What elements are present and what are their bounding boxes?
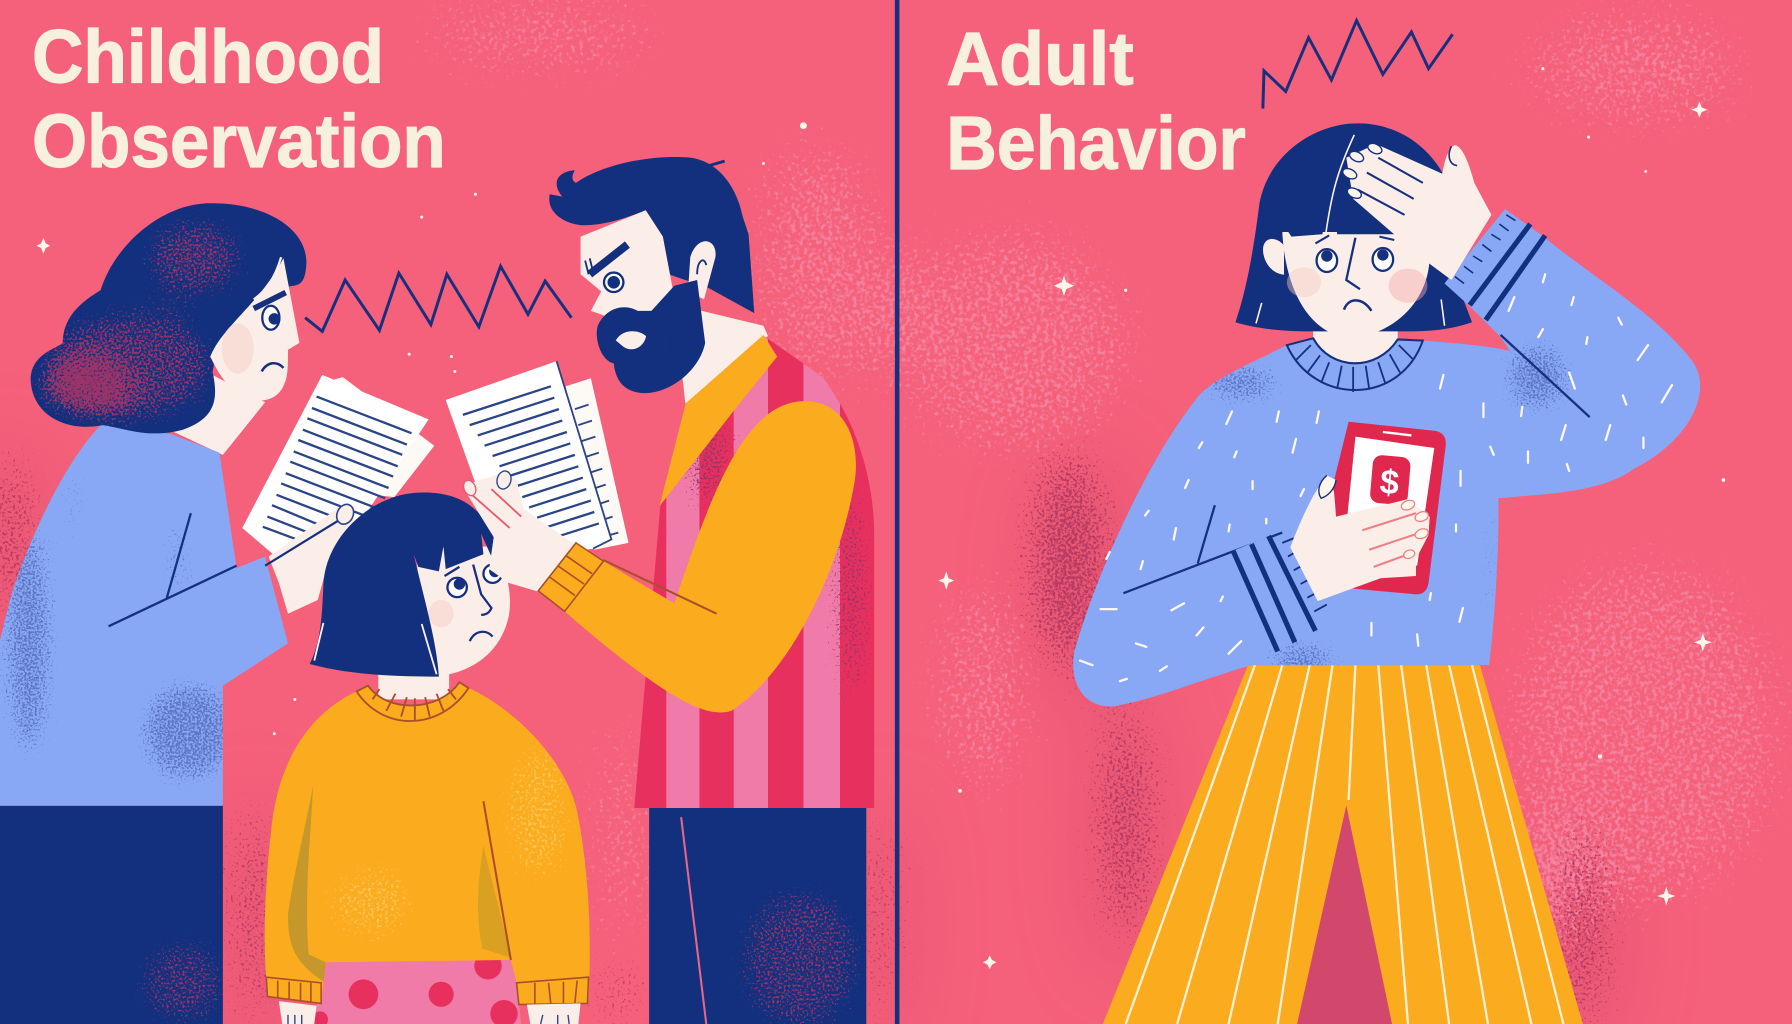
mouth <box>615 331 647 350</box>
father arm <box>565 401 856 712</box>
arm crease <box>603 560 717 614</box>
eyes <box>1317 249 1337 272</box>
arrow: zigzag stress line <box>1263 21 1453 109</box>
trouser stripes <box>1126 665 1563 1024</box>
back sheet lines <box>575 405 618 537</box>
fringe highlight <box>1326 135 1354 234</box>
papers held by mother <box>242 375 434 560</box>
father neck <box>681 309 768 407</box>
holding hand finger lines and nails <box>1362 513 1421 567</box>
eye <box>262 306 279 330</box>
icon: sparkles and dots <box>938 67 1725 969</box>
left cuff <box>1233 536 1327 651</box>
face <box>210 258 299 400</box>
eye <box>604 273 623 292</box>
hair speckle <box>29 211 251 429</box>
background texture: dark speckle <box>0 423 1622 1024</box>
back sheet <box>322 377 434 497</box>
hands <box>279 1001 317 1024</box>
cheeks <box>1287 267 1321 297</box>
striped vest <box>629 331 880 811</box>
front sheet <box>446 361 611 560</box>
divider line between panels <box>895 0 899 1024</box>
sweater texture <box>288 731 578 983</box>
neck <box>1313 320 1398 371</box>
icon: phone with dollar sign: $ <box>1378 463 1401 502</box>
fingers <box>463 487 521 528</box>
blush <box>429 600 454 627</box>
hand shape <box>464 473 577 592</box>
hair <box>549 157 754 313</box>
brows, nose and mouth <box>1315 235 1394 243</box>
child head <box>310 493 510 677</box>
trouser leg gap <box>1297 806 1392 1024</box>
figure: mother <box>0 371 288 1024</box>
cuff <box>538 543 603 611</box>
polka dots <box>312 952 518 1024</box>
mother neck <box>169 371 265 455</box>
mother sweater shading <box>0 472 223 790</box>
face <box>581 210 697 343</box>
child neck <box>378 669 449 699</box>
father trousers <box>649 808 866 1024</box>
back sheet <box>566 378 629 550</box>
panel: childhood observation <box>0 14 880 1024</box>
raised hand <box>1346 144 1491 280</box>
mother hand <box>265 502 357 614</box>
mother sweater <box>0 423 288 806</box>
beard <box>597 280 705 393</box>
background soft shading <box>0 446 1617 1024</box>
eyebrow <box>590 245 627 274</box>
figure: adult woman <box>1073 123 1700 1024</box>
father head <box>549 157 754 393</box>
background texture: light speckle <box>389 0 1792 1006</box>
face <box>416 546 510 677</box>
text lines <box>463 386 599 538</box>
arrow: zigzag argument line <box>305 266 571 331</box>
white knit flecks <box>1080 274 1672 681</box>
sweater <box>1073 209 1700 706</box>
heading: Childhood Observation: Childhood <box>32 14 384 98</box>
heading: Adult Behavior: Behavior <box>946 101 1246 185</box>
left cuff stripes <box>1233 536 1315 651</box>
mother skirt <box>0 806 223 1024</box>
sweater crease <box>483 801 511 960</box>
text lines <box>263 397 411 542</box>
figure: father <box>565 309 880 1024</box>
trousers <box>1103 665 1583 1024</box>
icon: phone with dollar sign <box>1326 422 1446 594</box>
panel: adult behavior <box>938 17 1725 1024</box>
hair <box>310 493 499 677</box>
heading: Childhood Observation <box>32 14 446 183</box>
mother sleeve creases <box>109 513 237 626</box>
eyebrow <box>254 293 286 309</box>
hair flick <box>709 161 737 206</box>
mother head <box>29 203 306 433</box>
hair <box>1235 123 1472 331</box>
child trousers <box>315 958 521 1024</box>
frown marks <box>585 258 593 274</box>
icon: sparkles and dots <box>37 122 807 735</box>
heading: Adult Behavior: Adult <box>946 17 1134 101</box>
ear <box>1262 238 1285 275</box>
front sheet <box>242 375 429 560</box>
fringe <box>1282 137 1417 237</box>
raised hand finger lines and nails <box>1358 158 1423 215</box>
hair <box>31 203 306 433</box>
sweater shading <box>1192 336 1576 690</box>
eyes <box>447 578 467 597</box>
figure: child <box>265 669 590 1024</box>
papers held by father <box>446 361 629 560</box>
blush <box>222 323 254 374</box>
collar <box>1287 338 1423 390</box>
beard speckle <box>648 323 689 374</box>
child sweater <box>265 688 590 1003</box>
father hand <box>461 469 603 611</box>
heading: Adult Behavior <box>946 17 1246 185</box>
collar <box>357 682 469 721</box>
right cuff <box>1445 209 1545 320</box>
skirt speckle <box>131 931 234 1024</box>
hair strand <box>254 257 281 299</box>
hand holding phone <box>1290 475 1430 601</box>
right cuff stripes <box>1470 224 1545 320</box>
trouser crease <box>681 817 706 1024</box>
brow, nose, mouth <box>445 567 459 576</box>
trouser speckle <box>731 880 869 1024</box>
mouth <box>262 363 283 371</box>
heading: Childhood Observation: Observation <box>32 99 446 183</box>
ear <box>688 241 716 299</box>
sleeve creases <box>1123 335 1590 593</box>
face <box>1282 232 1430 338</box>
cuffs <box>266 977 321 1003</box>
yellow shirt collar <box>659 335 777 506</box>
hair highlight <box>314 623 437 674</box>
